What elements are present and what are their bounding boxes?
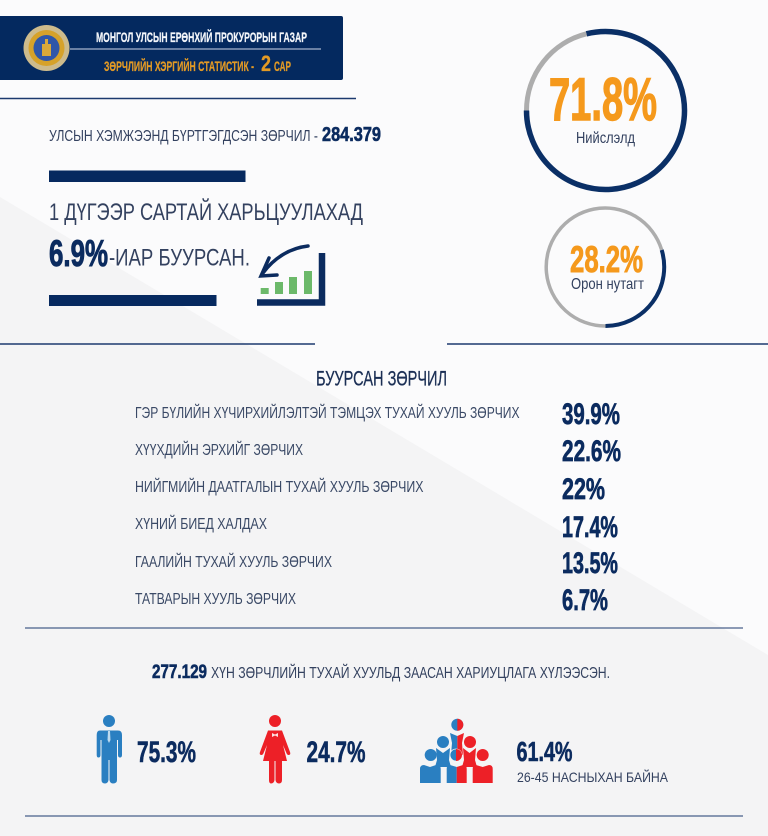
icon: declining chart with arrow <box>257 246 322 302</box>
row 2: ХҮҮХДИЙН ЭРХИЙГ ЗӨРЧИХ <box>135 440 303 459</box>
decrease percentage: -ИАР БУУРСАН. <box>109 244 250 272</box>
countryside label: Орон нутагт <box>571 276 645 293</box>
row 5: 13.5% <box>562 547 618 580</box>
section title: decreased offences: БУУРСАН ЗӨРЧИЛ <box>316 368 447 390</box>
row 3: 22% <box>562 473 605 506</box>
row 4: ХҮНИЙ БИЕД ХАЛДАХ <box>135 514 267 533</box>
row 4: 17.4% <box>562 511 618 544</box>
ring chart: capital 71.8% <box>526 32 685 190</box>
row 5: ГААЛИЙН ТУХАЙ ХУУЛЬ ЗӨРЧИХ <box>135 552 332 571</box>
summary sentence: ХҮН ЗӨРЧЛИЙН ТУХАЙ ХУУЛЬД ЗААСАН ХАРИУЦЛАГА ХҮЛЭЭСЭН. <box>211 663 610 682</box>
decrease percentage: 6.9% <box>49 233 108 274</box>
header subtitle: ЗӨРЧЛИЙН ХЭРГИЙН СТАТИСТИК - <box>104 57 254 74</box>
header banner <box>0 16 343 80</box>
header subtitle <box>104 51 291 76</box>
capital label: Нийслэлд <box>576 130 636 147</box>
list of decreased offences <box>135 398 621 617</box>
row 5 <box>135 547 618 580</box>
row 1: 39.9% <box>562 398 620 431</box>
national total registered offences: 284.379 <box>322 124 381 146</box>
row 4 <box>135 511 618 544</box>
icon: prosecutor emblem <box>24 25 70 71</box>
row 2 <box>135 435 621 468</box>
man percentage: 75.3% <box>137 736 196 769</box>
row 1 <box>135 398 620 431</box>
row 6 <box>135 584 608 617</box>
ring chart: countryside 28.2% <box>546 208 664 326</box>
header subtitle: 2 <box>261 51 271 76</box>
icon: woman <box>260 715 290 784</box>
national total registered offences: УЛСЫН ХЭМЖЭЭНД БҮРТГЭГДСЭН ЗӨРЧИЛ - <box>49 128 318 145</box>
age group percentage: 61.4% <box>516 736 573 767</box>
age group label: 26-45 НАСНЫХАН БАЙНА <box>517 768 669 785</box>
row 2: 22.6% <box>562 435 621 468</box>
decrease percentage <box>49 233 250 274</box>
summary sentence <box>152 662 610 683</box>
comparison heading: 1 ДҮГЭЭР САРТАЙ ХАРЬЦУУЛАХАД <box>49 198 363 226</box>
countryside value: 28.2% <box>570 239 643 280</box>
row 3: НИЙГМИЙН ДААТГАЛЫН ТУХАЙ ХУУЛЬ ЗӨРЧИХ <box>135 477 424 496</box>
header title: МОНГОЛ УЛСЫН ЕРӨНХИЙ ПРОКУРОРЫН ГАЗАР <box>96 28 307 45</box>
row 3 <box>135 473 605 506</box>
header subtitle: САР <box>274 58 291 74</box>
row 1: ГЭР БҮЛИЙН ХҮЧИРХИЙЛЭЛТЭЙ ТЭМЦЭХ ТУХАЙ ХУУЛЬ ЗӨРЧИХ <box>135 403 520 422</box>
row 6: 6.7% <box>562 584 608 617</box>
row 6: ТАТВАРЫН ХУУЛЬ ЗӨРЧИХ <box>135 591 296 608</box>
icon: group of people <box>420 719 493 783</box>
capital value: 71.8% <box>549 66 657 133</box>
icon: man <box>97 715 122 784</box>
woman percentage: 24.7% <box>306 736 366 769</box>
summary sentence: 277.129 <box>152 662 207 683</box>
